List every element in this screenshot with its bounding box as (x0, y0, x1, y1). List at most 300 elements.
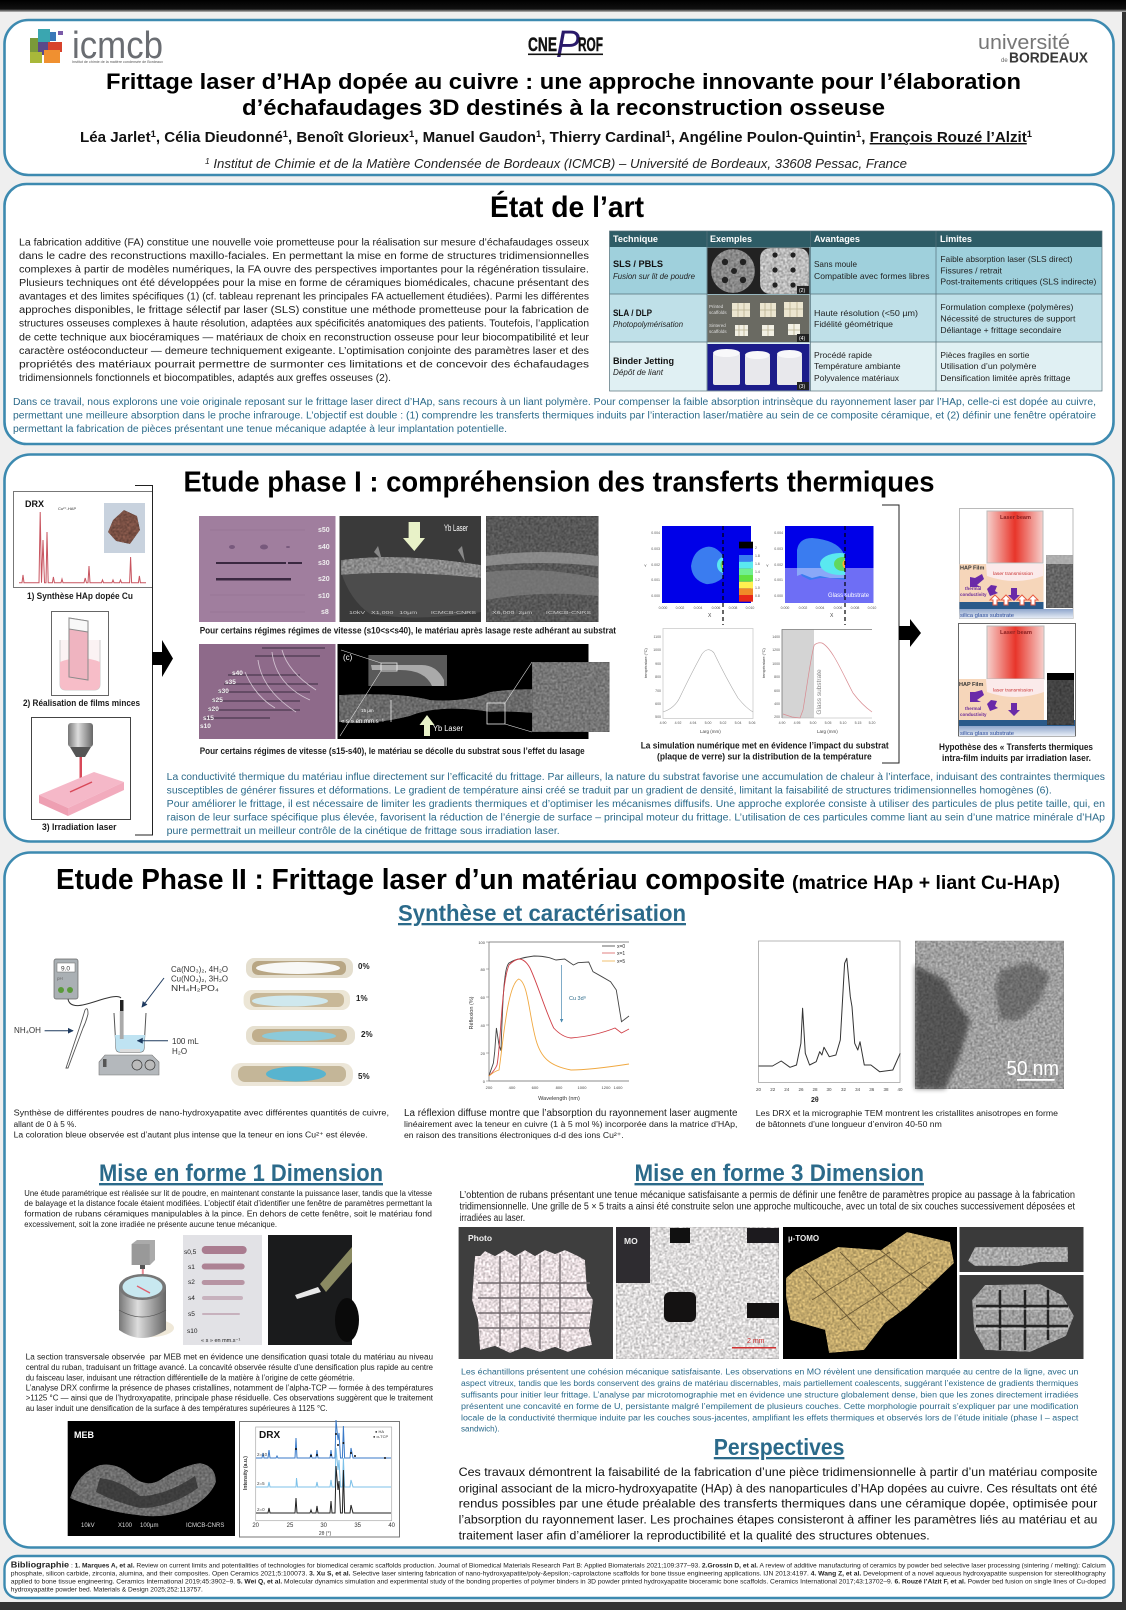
text block: perspectives (459, 1465, 1098, 1542)
chart: XRD: 34 (855, 1087, 861, 1092)
image: TEM micrograph: 50 nm (1006, 1058, 1059, 1080)
text block: 1D parameters: formation de rubans céramiques manipulables à la pince. En dehors de cette fenêtre, soit le matériau fond (24, 1210, 432, 1218)
panel: bibliography (4, 1556, 1114, 1598)
chart: temperature profile 2: 1000 (772, 662, 780, 666)
chart: simulation map without glass: Y (644, 563, 647, 568)
chart: temperature profile 2: 1400 (772, 635, 780, 639)
table header: Exemples (710, 234, 752, 244)
caption: synthesis: Synthèse de différentes poudres de nano-hydroxyapatite avec différentes quantités de cuivre, (14, 1109, 389, 1118)
image: scan speed tracks: s4 (188, 1295, 195, 1302)
chart: temperature profile 2 (761, 630, 875, 734)
chart: ribbon XRD: 20 (252, 1523, 260, 1529)
chart: diffuse reflectance: x=0 (617, 944, 625, 950)
caption: reflectance (404, 1108, 738, 1140)
image: scan speed tracks: « s » en mm.s⁻¹ (201, 1338, 240, 1344)
logo: CNEPROF (528, 24, 603, 66)
image: detached SEM: « s » en mm.s⁻¹ (341, 719, 384, 725)
image: adherent lines: s10 (318, 593, 330, 600)
chart: simulation map without glass: 0.001 (651, 578, 660, 582)
text block: perspectives: l’absorption du rayonnement laser. Les prochaines étapes consisteront à affiner les paramètres liés au matériau et au (459, 1512, 1097, 1526)
row: Binder Jetting: Procédé rapide (814, 350, 872, 360)
diagram: thermal transfers with wall effect: HAP Film (960, 566, 984, 572)
diagram: thermal transfers without wall effect: silica glass substrate (960, 731, 1014, 737)
chart: simulation map without glass: 0.002 (651, 563, 660, 567)
logo: CNEPROF: P (556, 24, 581, 66)
authors: François Rouzé l’Alzit (870, 130, 1027, 146)
text block: 1D analysis: L’analyse DRX confirme la présence de phases cristallines, notamment de l’alpha-TCP — formée à des températures (26, 1384, 433, 1392)
boat 0% (246, 958, 370, 978)
row: SLA: Formulation complexe (polymères) (940, 302, 1074, 312)
caption: hypothesis: intra-film induits par irradiation laser. (942, 753, 1091, 763)
chart: temperature profile 1: 600 (655, 702, 661, 706)
diagram: thermal transfers without wall effect: conductivity (960, 712, 987, 717)
caption: hypothesis: Hypothèse des « Transferts thermiques (939, 742, 1093, 752)
image: detached SEM: (c) (343, 653, 353, 662)
text block: introduction: caractère ostéoconducteur — demeure techniquement exigeante. L’optimisation conjointe des paramètres laser et des (19, 346, 589, 357)
chart: simulation map with glass (766, 526, 876, 625)
chart: simulation map with glass: 0.002 (799, 606, 807, 610)
chart: temperature profile 1: 4.90 (660, 721, 666, 725)
logo: université de Bordeaux: de (1001, 58, 1008, 64)
photo: optical microscopy (616, 1227, 779, 1359)
authors: 1 (151, 129, 156, 139)
chart: ribbon XRD: 2θ (°) (319, 1531, 331, 1537)
row: SLA: Nécessité de structures de support (940, 314, 1076, 324)
chart: simulation map without glass: 1.2 (755, 578, 760, 582)
row: Binder Jetting: Température ambiante (814, 361, 901, 371)
chart: temperature profile 1: 800 (655, 675, 661, 679)
chart: simulation map without glass: 1.8 (755, 554, 760, 558)
chart: ribbon XRD: DRX (259, 1430, 280, 1441)
chart: simulation map without glass: 0.003 (651, 547, 660, 551)
affiliation: Institut de Chimie et de la Matière Condensée de Bordeaux (ICMCB) – Université de Bordeaux, 33608 Pessac, France (210, 157, 907, 171)
chart: simulation map with glass: 0.003 (774, 547, 783, 551)
diagram: synthesis setup: 100 mL (172, 1037, 199, 1046)
chart: temperature profile 2: 200 (774, 715, 780, 719)
row: SLS (613, 248, 1097, 294)
section: mise en forme 1D (24, 1160, 434, 1537)
row: SLA: Printed (709, 304, 724, 309)
row: Binder Jetting (613, 344, 1071, 390)
chart: temperature profile 1: 5.02 (720, 721, 726, 725)
text block: 3D observations: suffisants pour initier leur frittage. L’analyse par microtomographie met en évidence une structure globalement dense, bien que les zones directement irradiées (461, 1391, 1078, 1400)
chart: temperature profile 2: 5.20 (869, 721, 875, 725)
heading: phase II: (matrice HAp + liant Cu-HAp) (792, 873, 1060, 894)
row: Binder Jetting: Utilisation d’un polymère (940, 361, 1037, 371)
table header: Limites (940, 234, 972, 244)
chart: temperature profile 1: 5.06 (749, 721, 755, 725)
chart: simulation map without glass: 1.4 (755, 570, 760, 574)
row: SLS: Sans moule (814, 259, 857, 269)
text block: introduction: de cette technique aux biocéramiques — matériaux de choix en reconstruction osseuse pour leur biocompatibilité et leur (19, 332, 590, 343)
row: SLS: Fusion sur lit de poudre (613, 271, 695, 281)
text block: introduction: La fabrication additive (FA) constitue une nouvelle voie prometteuse pour la réalisation sur mesure d’échafaudages osseux (19, 237, 589, 248)
text block: introduction: structures osseuses complexes à haute résolution, adaptées aux spécificités anatomiques des patients. Toutefois, l’application (19, 319, 589, 330)
chart: diffuse reflectance: 1200 (602, 1085, 611, 1090)
row: Binder Jetting: Dépôt de liant (613, 367, 664, 377)
diagram: thermal transfers with wall effect: silica glass substrate (960, 613, 1014, 619)
chart: temperature profile 1: 4.94 (690, 721, 696, 725)
panel: phase I (4, 454, 1114, 842)
chart: ribbon XRD: 35 (354, 1523, 362, 1529)
image: SEM section 1 (340, 516, 481, 622)
image: adherent lines: s20 (318, 576, 330, 583)
chart: simulation map with glass: 0.000 (781, 606, 789, 610)
chart: simulation map without glass: 0.8 (755, 594, 760, 598)
image: adherent lines (199, 516, 336, 622)
chart: diffuse reflectance: x=5 (617, 959, 625, 965)
heading: état de l'art: État de l’art (490, 190, 644, 224)
image: SEM ribbon cross section (68, 1421, 235, 1536)
photo: ribbon in tweezers (268, 1235, 359, 1345)
text block: phase I conclusions: susceptibles de générer fissures et déformations. Le gradient de température ainsi créé se traduit par un gradient de densité, limitant la faisabilité de structures tridimensionnelles homogènes (6). (167, 786, 1052, 796)
logo: ICMCB: icmcb (72, 25, 163, 67)
section: mise en forme 3D (459, 1160, 1098, 1542)
diagram: thermal transfers with wall effect: Laser beam (1000, 515, 1031, 521)
chart: ribbon XRD: Intensity (a.u.) (243, 1456, 249, 1490)
step 1: DRX synthesis (14, 492, 152, 601)
chart: temperature profile 1: 900 (655, 662, 661, 666)
text block: introduction (19, 237, 590, 384)
authors: 1 (666, 129, 671, 139)
image: detached SEM (338, 644, 588, 739)
chart: ribbon XRD: 40 (388, 1523, 396, 1529)
chart: simulation map without glass: 0.006 (712, 606, 720, 610)
caption: synthesis (14, 1109, 389, 1140)
chart: simulation map without glass: 1.0 (755, 586, 760, 590)
image: micro-tomography 3D (783, 1227, 957, 1359)
image: scan speed tracks: s5 (188, 1311, 195, 1318)
chart: temperature profile 2: 5.15 (855, 721, 861, 725)
text block: perspectives: traitement laser afin d’améliorer la reproductibilité et la qualité des structures obtenues. (459, 1528, 930, 1542)
chart: temperature profile 2: 5.05 (825, 721, 831, 725)
text block: perspectives: original associant de la micro-hydroxyapatite (HAp) à des nanoparticules d’HAp dopées au cuivre. Ces résultats ont été (459, 1481, 1098, 1495)
row: Binder Jetting: Binder Jetting (613, 356, 674, 367)
caption: reflectance: en raison des transitions électroniques d-d des ions Cu²⁺. (404, 1131, 624, 1140)
text block: 3D observations: locale de la conductivité thermique induite par les couches sous-jacentes, amplifiant les effets thermiques et observés lors de l’étude initiale (phase I – aspect (461, 1414, 1079, 1423)
text block: introduction: propriétés des matériaux pourrait permettre de surmonter ces limitations et de concevoir des échafaudages (19, 359, 589, 370)
image: scan speed tracks (183, 1235, 262, 1345)
affiliation: 1 (205, 157, 210, 166)
image: SEM ribbon cross section: X100 (118, 1523, 133, 1529)
heading: 3D: Mise en forme 3 Dimension (634, 1160, 924, 1187)
image: adherent lines: s50 (318, 527, 330, 534)
row: Binder Jetting: Pièces fragiles en sortie (940, 350, 1030, 360)
chart: diffuse reflectance (469, 940, 629, 1102)
diagram: synthesis setup: Ca(NO₃)₂, 4H₂O (171, 965, 228, 974)
caption: reflectance: linéairement avec la teneur en cuivre (1 à 5 mol %) incorporée dans la matrice d’HAp, (404, 1120, 738, 1129)
chart: simulation map without glass: 1.6 (755, 562, 760, 566)
photo: optical microscopy: MO (624, 1236, 638, 1246)
caption: simulation: (plaque de verre) sur la distribution de la température (657, 752, 872, 762)
authors: , (861, 130, 870, 146)
chart: XRD: 30 (826, 1087, 832, 1092)
row: SLS: Compatible avec formes libres (814, 271, 930, 281)
row: SLS: Fissures / retrait (940, 266, 1003, 276)
image: detached lines: s25 (212, 697, 223, 704)
chart: XRD: 26 (798, 1087, 804, 1092)
text block: perspectives: rendus possibles par une étude préalable des transferts thermiques dans une céramique dopée, optimisée pour (459, 1496, 1097, 1510)
chart: simulation map with glass: 0.002 (774, 563, 783, 567)
image: scan speed tracks: s1 (188, 1264, 195, 1271)
text block: 1D analysis: >1125 °C — ainsi que de l’hydroxyapatite, principale phase résiduelle. Ces observations suggèrent que le traitement (26, 1394, 434, 1403)
chart: diffuse reflectance: Cu 3d⁹ (569, 995, 586, 1002)
image: scan speed tracks: s2 (188, 1279, 195, 1286)
caption: synthesis: La coloration bleue observée est d’autant plus intense que la teneur en ions Cu²⁺ est élevée. (14, 1130, 368, 1140)
diagram: synthesis setup: pH (57, 976, 63, 981)
boat 5% (231, 1063, 370, 1086)
row: SLS: Faible absorption laser (SLS direct) (940, 254, 1073, 264)
chart: simulation map with glass: 0.000 (774, 594, 783, 598)
photo: powder boats (231, 958, 373, 1086)
authors: 1 (856, 129, 861, 139)
image: adherent lines: s8 (321, 609, 329, 616)
bracket (882, 505, 899, 763)
step 1: DRX synthesis: 1) Synthèse HAp dopée Cu (27, 591, 133, 601)
chart: temperature profile 1: 700 (655, 689, 661, 693)
chart: diffuse reflectance: 400 (509, 1085, 516, 1090)
chart: XRD: 24 (784, 1087, 790, 1092)
step 2: thin films (23, 612, 140, 708)
logo: université de Bordeaux: université (978, 32, 1070, 54)
logo: ICMCB (30, 25, 163, 67)
authors: , Manuel Gaudon (414, 130, 536, 146)
chart: simulation map with glass: Y (766, 563, 769, 568)
chart: ribbon XRD: ● α-TCP (373, 1434, 389, 1439)
chart: simulation map with glass: 0.004 (816, 606, 824, 610)
boat 1%: 1% (356, 994, 368, 1003)
boat 2%: 2% (361, 1030, 373, 1039)
authors: , Célia Dieudonné (156, 130, 283, 146)
chart: diffuse reflectance: 60 (481, 995, 486, 1000)
text block: references: phosphate, silicon carbide, zirconia, alumina, and their composites. Open Ceramics 2021;5:100073. 3. Xu S, et al. Selective laser sintering fabrication of nano-hydroxyapatite/poly-&epsilon;-caprolactone scaffolds for bone tissue engineering applications. IJN 2013:4197. 4. Wang Z, et al. Development of a novel aqueous hydroxyapatite suspension for stereolithography (11, 1571, 1107, 1578)
text block: 1D parameters (24, 1189, 433, 1229)
image: detached SEM: Yb Laser (433, 724, 463, 733)
chart: XRD: 2θ (811, 1097, 819, 1104)
heading: 1D: Mise en forme 1 Dimension (99, 1160, 383, 1187)
text block: references (11, 1560, 1107, 1594)
boat 2% (246, 1026, 373, 1045)
diagram: thermal transfers without wall effect (958, 624, 1076, 737)
text block: 3D intro: irradiées au laser. (460, 1213, 525, 1224)
text block: phase I conclusions: La conductivité thermique du matériau influe directement sur l’efficacité du frittage. Par ailleurs, la nature du substrat favorise une accumulation de chaleur à l’interface, induisant des contraintes thermiques (167, 772, 1105, 783)
chart: simulation map with glass: 0.006 (834, 606, 842, 610)
image: SEM section 1: 10kV X1,000 10µm ICMCB-CNRS (349, 610, 476, 615)
chart: diffuse reflectance: x=1 (617, 951, 625, 957)
text block: objectives: permettant la fabrication de pièces présentant une tenue mécanique adaptée à leur implantation potentielle. (13, 424, 507, 435)
chart: XRD: 22 (770, 1087, 776, 1092)
chart: simulation map with glass: 0.001 (774, 578, 783, 582)
chart: simulation map with glass: 0.008 (851, 606, 859, 610)
caption: synthesis: allant de 0 à 5 %. (14, 1120, 77, 1129)
row: Binder Jetting: Densification limitée après frittage (940, 373, 1071, 383)
chart: diffuse reflectance: 1000 (578, 1085, 587, 1090)
step 2: thin films: 2) Réalisation de films minces (23, 698, 140, 708)
caption: hypothesis (939, 742, 1093, 763)
caption: XRD and TEM (756, 1109, 1059, 1129)
chart: temperature profile 1 (643, 628, 755, 734)
authors: Léa Jarlet (80, 130, 148, 146)
photo: printed grid: Photo (468, 1233, 492, 1243)
image: tomography slices (960, 1227, 1084, 1359)
chart: simulation map with glass: 0.004 (774, 531, 783, 535)
image: detached lines: s15 (203, 715, 214, 722)
image: scan speed tracks: s0,5 (184, 1249, 197, 1256)
image: detached lines: s10 (200, 723, 211, 730)
image: SEM section 2 (486, 516, 599, 622)
chart: simulation map with glass: Glass substrate (828, 593, 870, 599)
authors: 1 (283, 129, 288, 139)
text block: 1D analysis: du faisceau laser, induisant une rétraction différentielle de la matière à l’origine de cette géométrie. (26, 1374, 355, 1383)
row: SLA: scaffolds (709, 329, 727, 334)
panel: état de l'art (4, 184, 1114, 444)
chart: simulation map without glass (644, 526, 760, 625)
chart: simulation map without glass: 2 (755, 546, 757, 550)
chart: temperature profile 1: 5.00 (705, 721, 711, 725)
text block: introduction: tridimensionnels fonctionnels et biocompatibles, adaptés aux greffes osseuses (2). (19, 373, 391, 384)
caption: detached: Pour certains régimes de vitesse (s15-s40), le matériau se décolle du substrat sous l’effet du lasage (200, 746, 585, 756)
chart: XRD: 28 (812, 1087, 818, 1092)
authors: , Benoît Glorieux (288, 130, 409, 146)
arrow: to experiments (152, 640, 173, 677)
image: detached lines: s20 (208, 706, 219, 713)
text block: 3D intro (460, 1190, 1075, 1224)
image: adherent lines: s30 (318, 560, 330, 567)
text block: references: applied to bone tissue engineering. Ceramics International 2019;45:3902–9. 5. Wei Q, et al. Molecular dynamics simulation and experimental study of the bonding properties of polymer binders in 3D powder printed hydroxyapatite bioceramic bone scaffolds. Ceramics International 2017;43:13702–9. 6. Rouzé l’Alzit F, et al. Powder bed fusion on single lines of Cu-doped (11, 1579, 1106, 1586)
chart: diffuse reflectance: 80 (481, 967, 486, 972)
chart: simulation map without glass: 0.000 (659, 606, 667, 610)
diagram: synthesis setup: NH₄H₂PO₄ (171, 984, 219, 993)
image: detached lines: s30 (218, 688, 229, 695)
chart: diffuse reflectance: 0 (483, 1079, 486, 1084)
diagram: thermal transfers with wall effect: thermal (965, 586, 981, 591)
image: adherent lines: s40 (318, 544, 330, 551)
step 1: DRX synthesis: DRX (25, 499, 44, 509)
logo: CNEPROF: ROF (578, 35, 603, 56)
table: techniques (610, 231, 1102, 391)
image: micro-tomography 3D: µ-TOMO (788, 1234, 819, 1243)
logo: université de Bordeaux: BORDEAUX (1009, 50, 1088, 66)
title: Frittage laser d’HAp dopée au cuivre : une approche innovante pour l’élaboration (106, 69, 1021, 94)
authors: 1 (536, 129, 541, 139)
text block: objectives: Dans ce travail, nous explorons une voie originale reposant sur le frittage laser direct d’HAp, sans recours à un liant polymère. Pour compenser la faible absorption intrinsèque du rayonnement laser par l’HAp, celle-ci est dopée au cuivre, (13, 397, 1096, 408)
chart: simulation map without glass: 0.004 (694, 606, 702, 610)
text block: 3D observations: présentent une concavité en forme de U, persistante malgré l’empilement de plusieurs couches. Cette morphologie pourrait s’expliquer par une modification (461, 1402, 1078, 1411)
diagram: thermal transfers with wall effect: laser transmission (993, 571, 1034, 576)
chart: diffuse reflectance: 100 (478, 940, 486, 945)
row: SLS: (2) (799, 288, 805, 294)
text block: 1D analysis: La section transversale observée par MEB met en évidence une densification quasi totale du matériau au niveau (26, 1352, 433, 1361)
chart: ribbon XRD: 30 (320, 1523, 328, 1529)
chart: XRD (756, 941, 903, 1104)
row: SLS: Post-traitements critiques (SLS indirecte) (940, 276, 1097, 286)
chart: temperature profile 2: 5.10 (840, 721, 846, 725)
caption: simulation (641, 741, 889, 762)
chart: ribbon XRD: ● HA (375, 1429, 384, 1434)
chart: temperature profile 1: 5.04 (735, 721, 741, 725)
chart: temperature profile 2: Glass substrate (816, 669, 823, 715)
chart: ribbon XRD: 2=0 (257, 1507, 265, 1512)
heading: perspectives: Perspectives (714, 1434, 844, 1460)
text block: 1D analysis: central du ruban, traduisant un frittage avancé. La concavité observée résulte d’une densification plus rapide au centre (26, 1363, 434, 1372)
caption: XRD and TEM: de bâtonnets d’une longueur d’environ 40-50 nm (756, 1120, 942, 1129)
chart: simulation map with glass: 0.010 (868, 606, 876, 610)
row: Binder Jetting: (3) (799, 384, 805, 390)
chart: temperature profile 2: 5.00 (810, 721, 816, 725)
row: SLA: Déliantage + frittage secondaire (940, 325, 1062, 335)
chart: XRD: 40 (897, 1087, 903, 1092)
chart: temperature profile 1: température (°C) (643, 648, 648, 678)
chart: ribbon XRD: 25 (287, 1523, 294, 1529)
row: SLA: Fidélité géométrique (814, 319, 893, 329)
chart: diffuse reflectance: 600 (532, 1085, 539, 1090)
text block: introduction: avantages et des limites spécifiques (1) (cf. tableau reprenant les principales FA actuellement étudiées). Parmi les différentes (19, 292, 589, 303)
table header (613, 234, 972, 244)
text block: objectives: permettant une meilleure absorption dans le proche infrarouge. L’objectif est double : (1) comprendre les transferts thermiques induits par l’interaction laser/matière au sein de ce composite céramique, et (2) définir une fenêtre opératoire (13, 411, 1096, 422)
chart: XRD: 32 (841, 1087, 846, 1092)
diagram: synthesis setup (14, 959, 228, 1075)
chart: temperature profile 1: 1000 (653, 648, 661, 652)
text block: introduction: complexes à partir de modèles numériques, la FA ouvre des perspectives importantes pour la régénération tissulaire. (19, 264, 589, 275)
row: SLA: Haute résolution (<50 µm) (814, 308, 918, 318)
title (106, 69, 1021, 120)
chart: temperature profile 2: température (°C) (761, 648, 766, 678)
photo: optical microscopy: 2 mm (747, 1338, 765, 1345)
diagram: synthesis setup: 9.0 (61, 966, 70, 972)
text block: phase I conclusions: Pour améliorer le frittage, il est nécessaire de limiter les gradients thermiques et d’optimiser les mécanismes diffusifs. Une approche explorée consiste à utiliser des particules de plus petite taille, qui, en (167, 799, 1105, 810)
chart: temperature profile 2: 400 (774, 702, 780, 706)
chart: temperature profile 2: 1200 (772, 648, 780, 652)
text block: phase I conclusions (167, 772, 1105, 837)
image: SEM section 2: X6,000 2µm ICMCB-CNRS (492, 610, 591, 615)
text block: 3D intro: L’obtention de rubans présentant une tenue mécanique satisfaisante a permis de définir une fenêtre de paramètres propice au passage à la fabrication (460, 1190, 1075, 1201)
chart: ribbon XRD: 2=10 (257, 1452, 268, 1457)
chart: simulation map with glass: X (830, 613, 834, 619)
text block: references: Bibliographie : 1. Marques A, et al. Review on current limits and potentialities of technologies for biomedical ceramic scaffolds production. Journal of Biomedical Materials Research Part B: Applied Biomaterials 2021;109:377–93. 2.Grossin D, et al. A review of additive manufacturing of ceramics by powder bed selective laser processing (sintering / melting): Calcium (11, 1560, 1106, 1570)
heading: synthèse: Synthèse et caractérisation (398, 900, 686, 926)
text block: 1D parameters: excessivement, soit la zone irradiée ne présente aucune tenue mécanique. (24, 1220, 277, 1229)
chart: simulation map without glass: 0.000 (651, 594, 660, 598)
image: SEM ribbon cross section: MEB (74, 1430, 94, 1440)
text block: 1D parameters: de balayage et la distance focale étaient modifiées. L’objectif était d’identifier une fenêtre de paramètres permettant la (24, 1199, 433, 1208)
chart: simulation map without glass: 0.002 (676, 606, 684, 610)
logo: CNEPROF: CNE (528, 35, 557, 56)
boat 5%: 5% (358, 1072, 370, 1081)
panel: header (4, 20, 1114, 175)
chart: temperature profile 2: 800 (774, 675, 780, 679)
text block: 3D observations: Les échantillons présentent une cohésion mécanique satisfaisante. Les observations en MO révèlent une densification marquée au centre de la ligne, avec un (461, 1367, 1078, 1376)
diagram: thermal transfers without wall effect: Laser beam (1000, 630, 1032, 636)
image: scan speed tracks: s10 (187, 1328, 198, 1335)
boat 0%: 0% (358, 962, 370, 971)
chart: ribbon XRD: 2=5 (257, 1481, 265, 1486)
chart: XRD: 38 (883, 1087, 889, 1092)
text block: introduction: approches disponibles, le frittage sélectif par laser (SLS) constitue une méthode prometteuse pour la fabrication de (19, 305, 589, 316)
image: SEM ribbon cross section: 100µm (140, 1523, 158, 1529)
row: SLA (613, 295, 1076, 342)
text block: 1D analysis (26, 1352, 434, 1413)
authors: , Thierry Cardinal (541, 130, 666, 146)
chart: temperature profile 2: 600 (774, 689, 780, 693)
chart: simulation map without glass: 0.008 (729, 606, 737, 610)
diagram: synthesis setup: Cu(NO₃)₂, 3H₂O (171, 974, 228, 984)
table header: Technique (613, 234, 658, 244)
arrow: to hypothesis (899, 619, 921, 647)
diagram: synthesis setup: H₂O (172, 1047, 187, 1056)
chart: temperature profile 1: 4.92 (675, 721, 681, 725)
step 3: laser irradiation: 3) Irradiation laser (42, 822, 117, 832)
row: Binder Jetting: Polyvalence matériaux (814, 373, 900, 383)
